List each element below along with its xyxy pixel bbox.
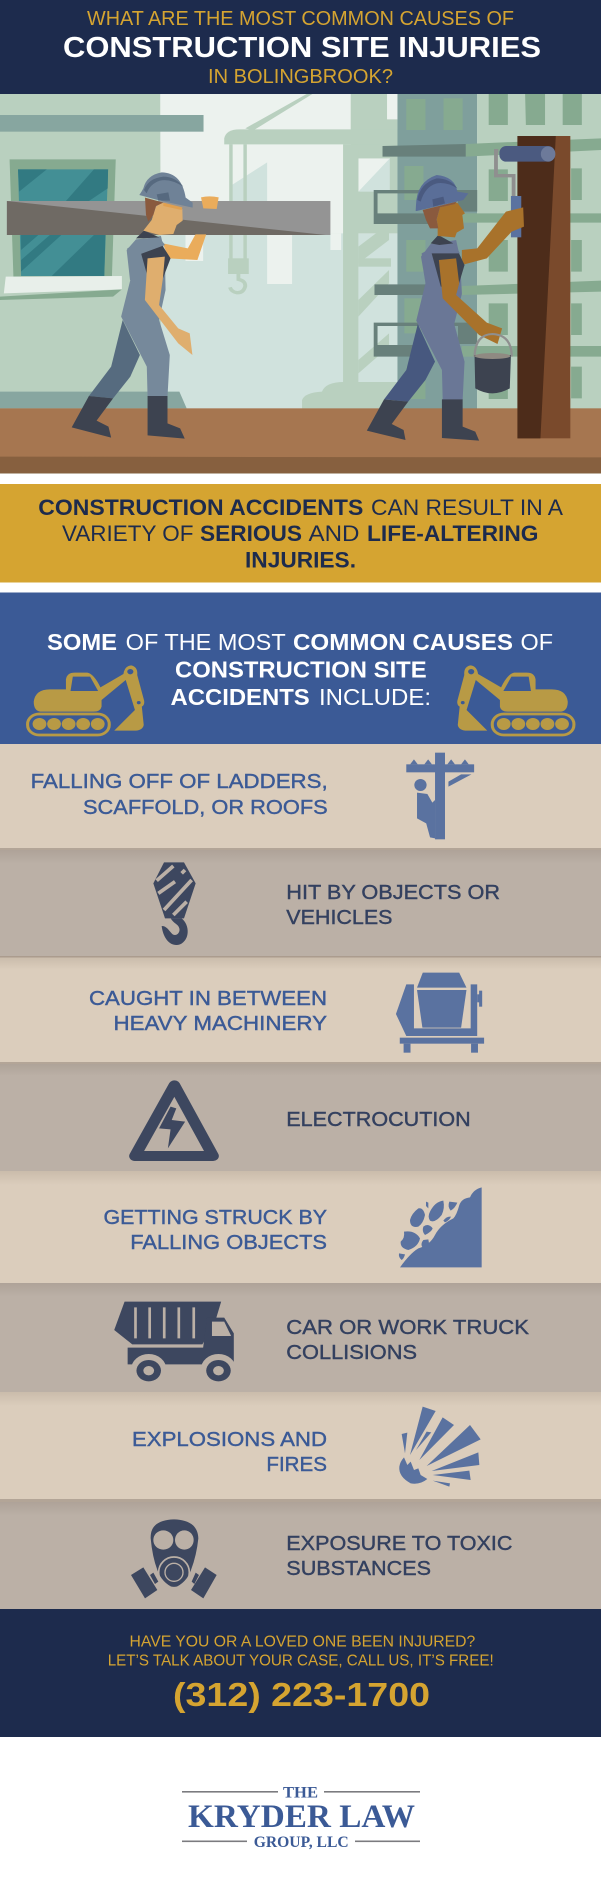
text: call to action bbox=[108, 1634, 494, 1670]
roller bbox=[496, 146, 555, 237]
logo: The Kryder Law Group: THE bbox=[283, 1785, 318, 1802]
panel: falling objects: GETTING STRUCK BY bbox=[104, 1207, 327, 1229]
logo: The Kryder Law Group bbox=[182, 1785, 420, 1851]
panel: toxic substances bbox=[0, 1502, 601, 1609]
phone number: (312) 223-1700 bbox=[173, 1676, 430, 1713]
panel: caught in machinery bbox=[0, 958, 601, 1064]
callout: gold banner: INJURIES. bbox=[245, 548, 356, 573]
icon: explosion bbox=[399, 1407, 481, 1487]
left building bbox=[0, 94, 161, 408]
panel: explosions: EXPLOSIONS AND bbox=[132, 1429, 327, 1451]
icon: utility pole climber bbox=[406, 753, 474, 839]
panel: hit by objects: HIT BY OBJECTS OR bbox=[286, 882, 500, 904]
panel: hit by objects: VEHICLES bbox=[286, 907, 392, 929]
header panel bbox=[0, 0, 601, 94]
worker 1 body bbox=[7, 201, 330, 439]
panel: truck collisions: CAR OR WORK TRUCK bbox=[286, 1317, 530, 1339]
panel: causes intro: OF bbox=[520, 629, 553, 655]
panel: toxic substances: SUBSTANCES bbox=[286, 1558, 431, 1580]
right buildings bbox=[397, 94, 477, 409]
panel: caught in machinery: CAUGHT IN BETWEEN bbox=[89, 988, 327, 1010]
callout: gold banner: AND bbox=[308, 521, 360, 546]
panel: toxic substances: EXPOSURE TO TOXIC bbox=[286, 1533, 512, 1555]
panel: falling off ladders: FALLING OFF OF LADDERS, bbox=[31, 771, 328, 793]
heading line 2: CONSTRUCTION SITE INJURIES bbox=[63, 32, 541, 64]
panel: falling off ladders bbox=[0, 744, 601, 850]
panel: causes intro: CONSTRUCTION SITE bbox=[175, 657, 427, 683]
scaffold bbox=[374, 144, 477, 357]
text: call to action: LET’S TALK ABOUT YOUR CASE, CALL US, IT’S FREE! bbox=[108, 1653, 494, 1670]
worker 2 head bbox=[416, 175, 468, 280]
panel: causes intro: SOME bbox=[47, 629, 117, 655]
panel: falling off ladders: SCAFFOLD, OR ROOFS bbox=[83, 797, 328, 819]
panel: electrocution bbox=[0, 1064, 601, 1171]
bucket bbox=[475, 334, 512, 393]
panel: truck collisions bbox=[0, 1283, 601, 1392]
panel: causes intro: OF THE MOST bbox=[126, 629, 286, 655]
icon: high voltage warning bbox=[135, 1085, 213, 1156]
ground bbox=[0, 408, 601, 473]
icon: excavator right bbox=[457, 665, 574, 735]
callout: gold banner: CAN RESULT IN A bbox=[371, 495, 563, 520]
icon: cement mixer bbox=[396, 973, 484, 1053]
panel: truck collisions: COLLISIONS bbox=[286, 1342, 417, 1364]
callout: gold banner: CONSTRUCTION ACCIDENTS bbox=[38, 495, 363, 520]
callout: gold banner: SERIOUS bbox=[200, 521, 302, 546]
panel: falling objects: FALLING OBJECTS bbox=[130, 1232, 327, 1254]
panel: causes intro bbox=[0, 592, 601, 744]
post bbox=[517, 136, 570, 438]
crane bbox=[224, 94, 399, 408]
text: call to action: HAVE YOU OR A LOVED ONE BEEN INJURED? bbox=[130, 1634, 475, 1651]
panel: causes intro: INCLUDE: bbox=[319, 684, 431, 710]
callout: gold banner bbox=[0, 484, 601, 582]
icon: gas mask bbox=[131, 1519, 217, 1598]
panel: hit by objects bbox=[0, 850, 601, 958]
worker 2 body bbox=[367, 207, 524, 441]
panel: falling objects bbox=[0, 1171, 601, 1283]
panel: caught in machinery: HEAVY MACHINERY bbox=[114, 1013, 327, 1035]
panel: explosions: FIRES bbox=[266, 1454, 327, 1476]
heading line 3: IN BOLINGBROOK? bbox=[208, 66, 393, 88]
icon: rockslide bbox=[399, 1187, 482, 1267]
callout: gold banner: VARIETY OF bbox=[62, 521, 194, 546]
panel: causes intro: COMMON CAUSES bbox=[293, 629, 513, 655]
icon: crane hook bbox=[153, 862, 196, 945]
illustration: construction workers bbox=[0, 94, 601, 474]
logo: The Kryder Law Group: GROUP, LLC bbox=[254, 1834, 349, 1851]
logo: The Kryder Law Group: KRYDER LAW bbox=[188, 1799, 415, 1835]
panel: electrocution: ELECTROCUTION bbox=[286, 1109, 471, 1131]
callout: gold banner: LIFE-ALTERING bbox=[367, 521, 538, 546]
panel: causes intro: ACCIDENTS bbox=[170, 684, 310, 710]
icon: excavator left bbox=[28, 665, 144, 735]
panel: call to action bbox=[0, 1609, 601, 1737]
panel: explosions bbox=[0, 1392, 601, 1502]
worker 1 head bbox=[127, 172, 219, 280]
heading line 1: WHAT ARE THE MOST COMMON CAUSES OF bbox=[87, 8, 514, 30]
icon: dump truck bbox=[114, 1302, 236, 1385]
